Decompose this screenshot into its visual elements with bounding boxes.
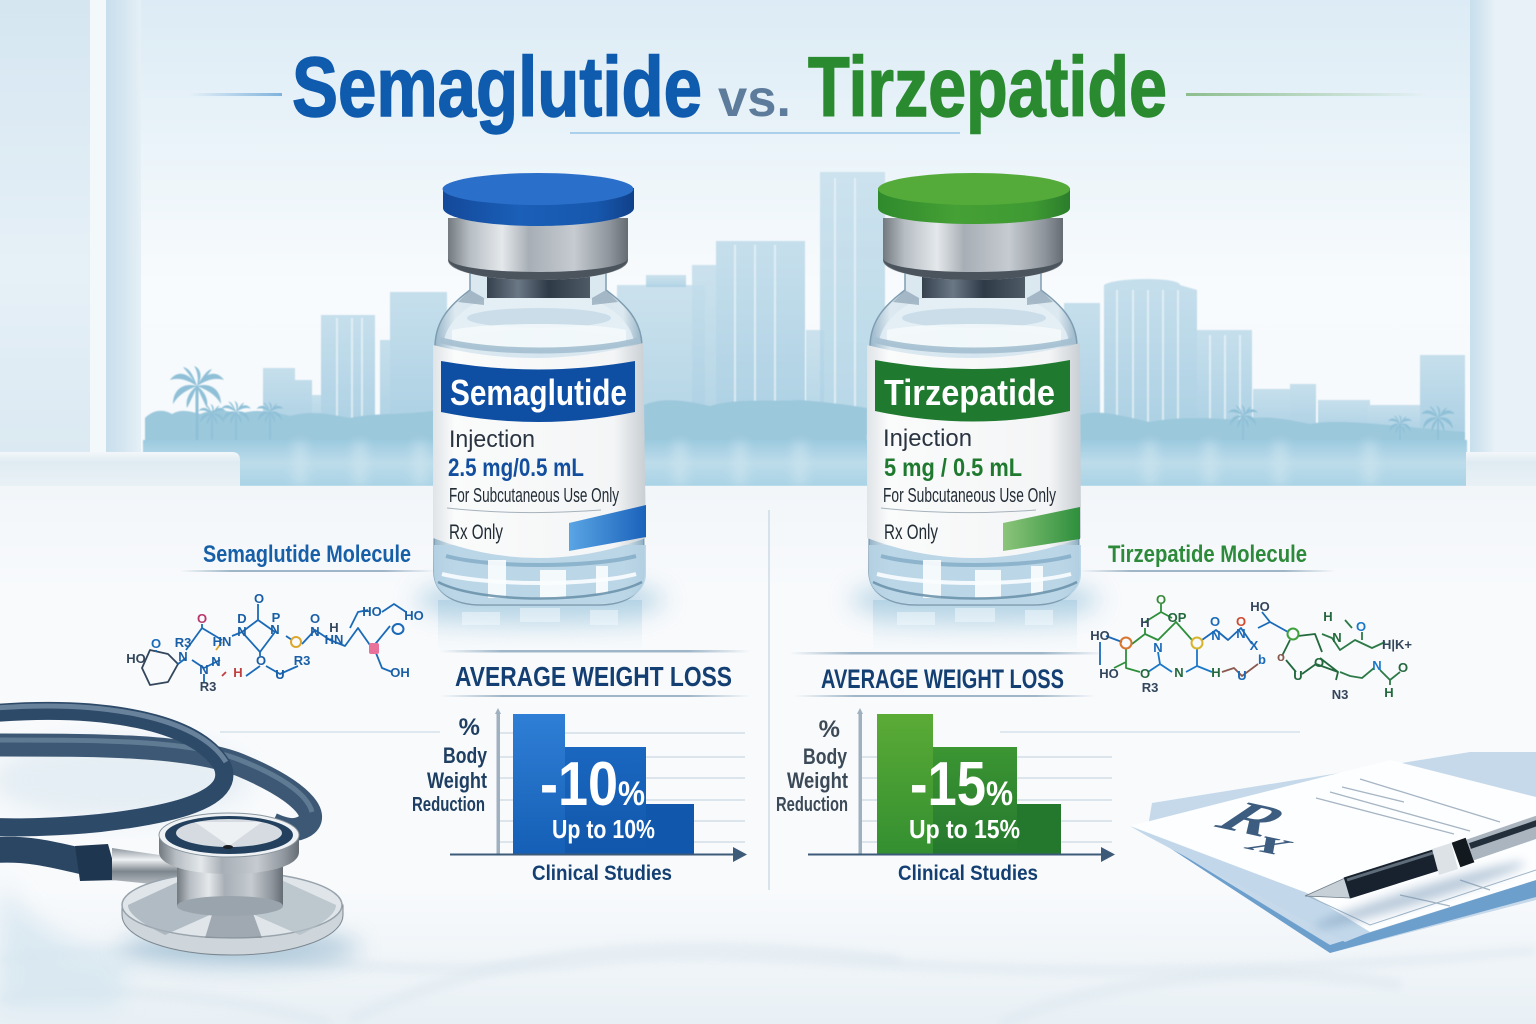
molecule diagram: tirzepatide: o [1277,649,1285,664]
molecule diagram: semaglutide: P [272,610,281,625]
molecule diagram: semaglutide: HO [362,604,382,619]
vial label: For Subcutaneous Use Only [449,485,619,507]
y-axis label: Body [803,744,848,769]
rx symbol: x [1233,825,1316,860]
y-axis label: % [819,716,840,743]
vial label: Tirzepatide [884,372,1055,413]
vial label: Injection [449,426,535,453]
molecule diagram: tirzepatide: N [1332,630,1342,645]
bars [495,708,694,854]
icon: palm trees [170,366,1455,453]
molecule diagram: semaglutide: N [199,662,209,677]
vial label: Semaglutide [450,372,627,413]
y-axis label: Reduction [776,794,848,816]
molecule diagram: tirzepatide: O [1236,614,1246,629]
value: -10% [540,750,655,844]
skyline illustration [143,172,1467,486]
molecule diagram: semaglutide: D [237,611,247,626]
stethoscope chest piece [122,813,343,955]
molecule diagram: tirzepatide: O [1398,660,1408,675]
molecule diagram: semaglutide: N [310,624,320,639]
molecule diagram: semaglutide: HO [126,651,146,666]
vial label [433,343,646,558]
molecule diagram: tirzepatide: O [1314,655,1324,670]
molecule diagram: semaglutide: HN [213,634,231,649]
icon: stethoscope [0,706,360,966]
molecule diagram: semaglutide: N [211,654,221,669]
molecule diagram: semaglutide: O [197,611,207,626]
molecule diagram: semaglutide: U [275,667,285,682]
y-axis label: Weight [787,768,849,793]
value: -15%: -15 [910,750,986,819]
molecule diagram: semaglutide: N [178,649,188,664]
title: Tirzepatide [808,40,1167,134]
vial cap: blue [442,173,634,226]
molecule diagram: tirzepatide: OP [1168,610,1187,625]
heading: semaglutide molecule: Semaglutide Molecule [203,541,411,568]
molecule diagram: tirzepatide: H [1140,615,1150,630]
molecule diagram: semaglutide: H [329,620,339,635]
molecule diagram: tirzepatide: HO [1099,666,1119,681]
molecule diagram: tirzepatide: N [1174,665,1184,680]
axis caption: Clinical Studies [532,862,672,885]
molecule diagram: tirzepatide: HO [1090,628,1110,643]
y-axis label: Body [443,743,488,768]
molecule diagram: semaglutide: O [310,611,320,626]
value: -10%: Up to 10% [552,814,655,844]
y-axis label: % [459,714,480,741]
molecule diagram: tirzepatide: R3 [1142,680,1158,695]
y-axis label [412,714,488,816]
divider lines [180,510,1335,890]
value: -15%: % [986,775,1013,813]
panel: semaglutide weight loss chart [412,650,750,885]
illustration: prescription with pen [1130,752,1536,953]
bars [857,708,1061,854]
vial cap: green [878,173,1070,224]
vial label: 2.5 mg/0.5 mL [448,454,584,482]
molecule diagram: tirzepatide: N [1211,628,1221,643]
vial label: Injection [883,425,972,452]
title [190,40,1426,134]
molecule diagram: tirzepatide: O [1140,666,1150,681]
molecule diagram: semaglutide: O [254,591,264,606]
molecule diagram: tirzepatide: U [1237,668,1247,683]
molecule diagram: semaglutide: R3 [200,679,216,694]
molecule diagram: semaglutide: N [270,622,280,637]
axis caption: Clinical Studies [898,862,1038,885]
molecule diagram: tirzepatide: O [1156,592,1166,607]
molecule diagram: tirzepatide: H|K+ [1382,637,1412,652]
molecule diagram: tirzepatide: b [1258,652,1266,667]
rx symbol: R [1200,794,1308,845]
vial: tirzepatide [850,173,1100,652]
molecule diagram: tirzepatide: X [1250,638,1259,653]
x axis arrow [808,847,1115,862]
molecule diagram: tirzepatide [1090,592,1412,702]
molecule diagram: tirzepatide: N [1372,658,1382,673]
molecule diagram: semaglutide: OH [390,665,410,680]
molecule diagram: semaglutide: HN [325,632,343,647]
vial label: Rx Only [884,521,938,544]
value: -10%: % [618,775,645,813]
title: Semaglutide [292,40,702,134]
window sills [0,452,1536,486]
molecule diagram: tirzepatide: N [1153,640,1163,655]
vial: semaglutide [415,173,665,652]
tree line [145,400,1465,442]
vial label: 5 mg / 0.5 mL [884,454,1022,482]
vial label: Rx Only [449,521,503,544]
molecule diagram: semaglutide: R3 [294,653,310,668]
molecule diagram: tirzepatide: H [1323,609,1333,624]
molecule diagram: tirzepatide: O [1210,614,1220,629]
molecule diagram: tirzepatide: U [1293,668,1303,683]
molecule diagram: tirzepatide: N [1236,626,1246,641]
heading: average weight loss: AVERAGE WEIGHT LOSS [821,664,1064,694]
heading: tirzepatide molecule: Tirzepatide Molecule [1108,541,1307,568]
molecule diagram: tirzepatide: N3 [1332,687,1348,702]
vial label [867,343,1081,558]
table surface: marble [0,486,1536,1024]
heading: average weight loss: AVERAGE WEIGHT LOSS [455,661,732,692]
molecule diagram: tirzepatide: H [1384,685,1394,700]
molecule diagram: semaglutide: HO [404,608,424,623]
y-axis label: Weight [427,768,488,793]
panel: tirzepatide weight loss chart [776,652,1115,885]
molecule diagram: semaglutide [126,591,424,694]
molecule diagram: semaglutide: O [256,653,266,668]
molecule diagram: semaglutide: N [237,624,247,639]
y-axis label: Reduction [412,794,485,816]
background: clinic window wall [0,0,1536,490]
value: -15% [909,750,1020,844]
title: vs. [718,70,791,128]
molecule diagram: semaglutide: R3 [175,635,191,650]
y-axis label [776,716,849,816]
molecule diagram: tirzepatide: HO [1250,599,1270,614]
vial label: For Subcutaneous Use Only [883,485,1056,507]
molecule diagram: tirzepatide: H [1211,665,1221,680]
molecule diagram: semaglutide: O [151,636,161,651]
value: -10%: -10 [540,750,618,819]
x axis arrow [450,847,747,862]
molecule diagram: semaglutide: H [233,665,243,680]
value: -15%: Up to 15% [909,814,1020,844]
molecule diagram: tirzepatide: O [1356,619,1366,634]
pen [1305,822,1536,898]
